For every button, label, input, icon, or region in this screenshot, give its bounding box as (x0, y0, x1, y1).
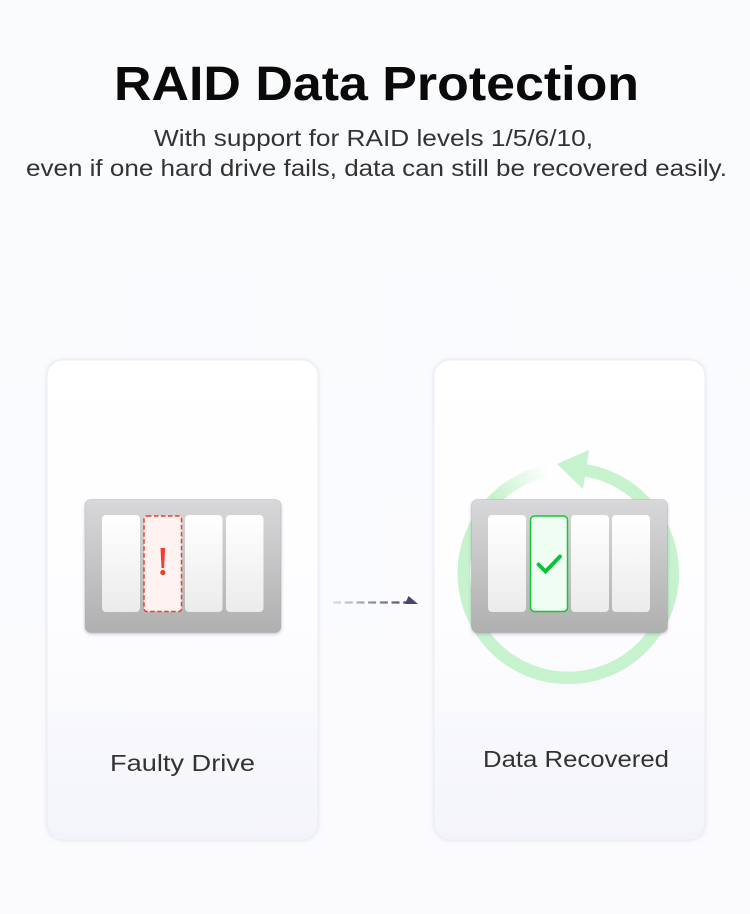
panel background: faulty drive (47, 360, 318, 840)
icon: exclamation mark (160, 548, 165, 575)
arrow: dashed transition arrow (333, 596, 418, 604)
title: RAID Data Protection (114, 58, 639, 111)
subtitle text block: With support for RAID levels 1/5/6/10, (154, 125, 593, 151)
label: Data Recovered: Data Recovered (483, 746, 669, 772)
subtitle text block: even if one hard drive fails, data can still be recovered easily. (26, 155, 727, 181)
label: Faulty Drive: Faulty Drive (110, 750, 255, 776)
panel: data recovered (434, 360, 705, 840)
panel: faulty drive (47, 360, 318, 840)
icon: circular recovery arrow (464, 450, 673, 678)
panel background: data recovered (434, 360, 705, 840)
subtitle text block (26, 125, 727, 181)
drive enclosure: recovered (472, 500, 668, 632)
drive enclosure: faulty (85, 500, 281, 632)
icon: check mark (538, 556, 560, 572)
